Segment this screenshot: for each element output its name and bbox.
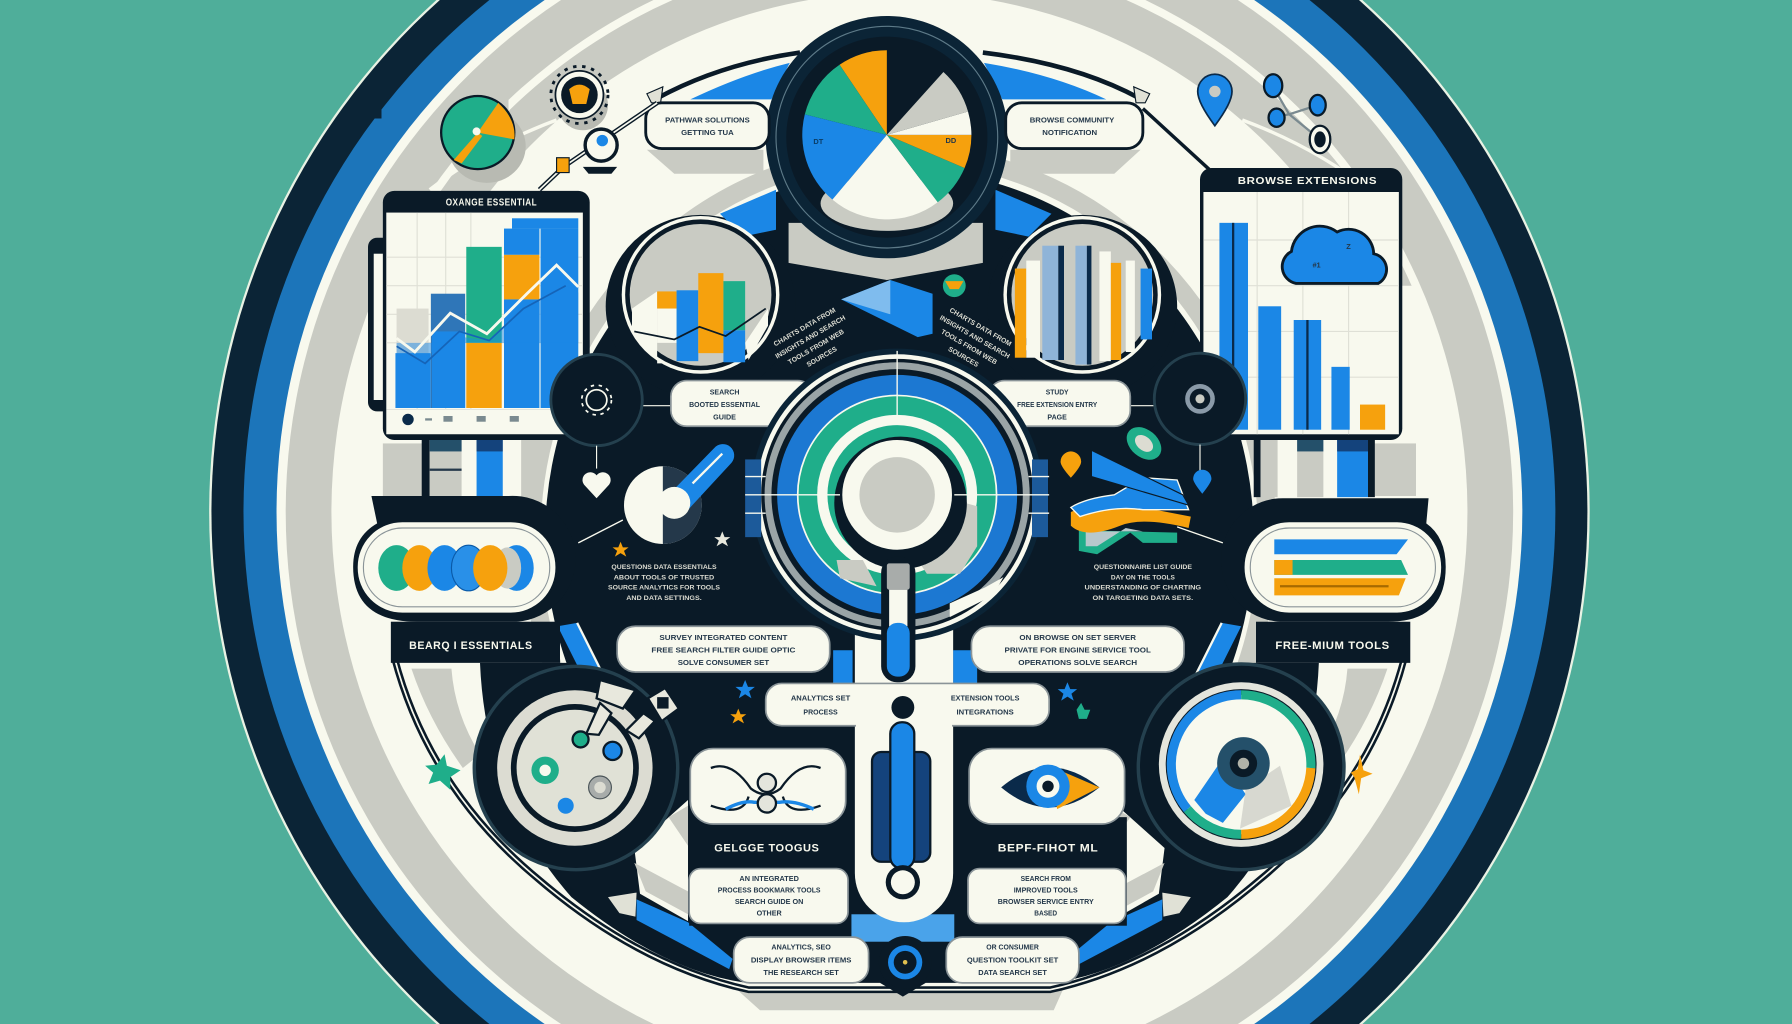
white star <box>714 531 730 546</box>
pie labels: DT <box>813 137 824 146</box>
right description text: QUESTIONNAIRE LIST GUIDE <box>1094 564 1192 571</box>
top right pill: BROWSE COMMUNITY <box>1030 115 1114 124</box>
right small card: BASED <box>1034 908 1058 917</box>
small text diagonal right: SOURCES <box>947 346 980 369</box>
bottom right pill <box>946 937 1079 983</box>
orange pin <box>1061 451 1081 478</box>
right description text <box>1085 564 1201 602</box>
left magnified bars circle <box>622 216 779 374</box>
center left pill <box>671 381 814 426</box>
left small card: AN INTEGRATED <box>739 874 799 883</box>
small text diagonal right: INSIGHTS AND SEARCH <box>938 315 1011 361</box>
dark central body <box>480 169 1319 997</box>
center rod <box>872 696 930 899</box>
probes <box>573 680 679 760</box>
lower left pill: FREE SEARCH FILTER GUIDE OPTIC <box>651 646 796 655</box>
left tool illustration <box>624 444 734 544</box>
left description text: ABOUT TOOLS OF TRUSTED <box>614 574 714 581</box>
center right pill <box>989 381 1130 426</box>
top pie chart <box>766 16 1008 258</box>
card label: BEPF-FIHOT ML <box>998 842 1098 854</box>
right small orange star <box>1351 754 1373 794</box>
left description text: SOURCE ANALYTICS FOR TOOLS <box>608 585 720 592</box>
bottom left pill: ANALYTICS, SEO <box>771 943 831 952</box>
blue bottom bands <box>608 893 1191 969</box>
top right pill: NOTIFICATION <box>1042 128 1097 137</box>
blue pin <box>1193 470 1211 494</box>
gray wedges beside gauges <box>411 669 1387 1010</box>
right magnified bars circle <box>1003 216 1161 374</box>
center left pill: SEARCH <box>710 387 739 396</box>
top left pill: PATHWAR SOLUTIONS <box>665 115 750 124</box>
left small card: PROCESS BOOKMARK TOOLS <box>718 886 821 895</box>
blue and navy stars <box>735 680 755 698</box>
lower ring line <box>394 657 1405 990</box>
horizontal cross pill: INTEGRATIONS <box>957 707 1014 716</box>
bottom center target <box>879 936 931 989</box>
small text diagonal left <box>769 305 858 380</box>
top left pill: GETTING TUA <box>681 128 734 137</box>
concentric outer rings <box>209 0 1590 1024</box>
eye icon <box>1001 765 1099 809</box>
bottom right pill: QUESTION TOOLKIT SET <box>967 955 1059 964</box>
left gear node <box>551 354 686 469</box>
small text diagonal left: INSIGHTS AND SEARCH <box>774 315 847 361</box>
bottom left pill <box>734 937 869 983</box>
right stacked tool illustration <box>1071 420 1191 554</box>
cloud icon <box>1282 226 1387 283</box>
lower left pill <box>617 626 830 672</box>
left small card: OTHER <box>757 908 782 917</box>
map pin top right <box>1198 74 1232 126</box>
gear icon <box>551 66 608 130</box>
left capsule panel <box>353 496 576 663</box>
right small card: IMPROVED TOOLS <box>1014 886 1078 895</box>
top left pill <box>646 103 769 149</box>
right description text: DAY ON THE TOOLS <box>1111 574 1175 581</box>
shadows under top pills <box>647 150 1141 174</box>
orange small star <box>730 709 746 723</box>
small top left pie icon <box>440 95 526 183</box>
right description text: ON TARGETING DATA SETS. <box>1093 595 1193 602</box>
center right pill: STUDY <box>1046 387 1069 396</box>
left small card <box>689 749 848 926</box>
top blue arch <box>647 53 1211 171</box>
green mark <box>1077 703 1090 719</box>
pie labels <box>813 136 957 146</box>
bottom right pill: OR CONSUMER <box>986 943 1039 952</box>
panel label <box>1256 622 1410 663</box>
left description text: QUESTIONS DATA ESSENTIALS <box>611 564 717 571</box>
lower right pill: ON BROWSE ON SET SERVER <box>1019 633 1137 642</box>
small text diagonal left: TOOLS FROM WEB <box>787 329 846 366</box>
small text diagonal right <box>927 305 1016 380</box>
cloud icon: #1 <box>1312 260 1321 269</box>
lower right pill: OPERATIONS SOLVE SEARCH <box>1018 658 1137 667</box>
panel label <box>391 622 560 663</box>
center left pill: BOOTED ESSENTIAL <box>689 400 760 409</box>
connector node <box>539 103 657 190</box>
lower left pill: SOLVE CONSUMER SET <box>678 658 770 667</box>
left small star <box>425 754 461 790</box>
network nodes <box>1264 74 1330 153</box>
small text diagonal right: CHARTS DATA FROM <box>948 307 1013 348</box>
center left pill: GUIDE <box>713 412 736 421</box>
right target node <box>1126 353 1246 471</box>
tiny badge <box>943 274 966 297</box>
side tabs <box>745 459 1048 537</box>
top right pill <box>1006 103 1143 149</box>
center right pill: PAGE <box>1047 412 1067 421</box>
lens shadow <box>837 501 1003 617</box>
gray hexagon with blue shard <box>789 223 983 337</box>
small text diagonal left: SOURCES <box>806 346 839 369</box>
chart heading: OXANGE ESSENTIAL <box>446 198 537 209</box>
pie labels: DD <box>946 136 957 145</box>
small text diagonal right: TOOLS FROM WEB <box>940 329 998 366</box>
fan strips below gauges <box>634 800 1165 921</box>
vertical ivory stem <box>855 571 953 922</box>
right small card <box>968 749 1127 926</box>
lower right pill: PRIVATE FOR ENGINE SERVICE TOOL <box>1005 646 1151 655</box>
magnifier handle <box>881 557 915 682</box>
left description text <box>608 564 720 602</box>
horizontal cross pill <box>766 683 1049 731</box>
center right pill: FREE EXTENSION ENTRY <box>1017 400 1097 409</box>
heart icon <box>583 472 611 498</box>
right description text: UNDERSTANDING OF CHARTING <box>1085 585 1201 592</box>
right small card: SEARCH FROM <box>1021 874 1071 883</box>
small text diagonal left: CHARTS DATA FROM <box>773 307 837 348</box>
pill connector lines <box>578 520 1223 543</box>
column stripes under charts <box>383 440 1416 497</box>
right bar chart panel <box>1200 168 1402 440</box>
horizontal cross pill: PROCESS <box>803 707 838 716</box>
card label: GELGGE TOOGUS <box>714 842 819 854</box>
panel label: FREE-MIUM TOOLS <box>1275 640 1390 652</box>
right gauge ring <box>1138 664 1344 870</box>
right blue star <box>1058 682 1077 701</box>
horizontal cross pill: EXTENSION TOOLS <box>951 694 1019 703</box>
lower left pill: SURVEY INTEGRATED CONTENT <box>659 633 788 642</box>
cloud icon: Z <box>1346 242 1351 251</box>
right bars capsule panel <box>1221 498 1446 663</box>
left gauge dial <box>474 666 679 870</box>
bottom left pill: DISPLAY BROWSER ITEMS <box>751 955 851 964</box>
panel label: BEARQ I ESSENTIALS <box>409 640 533 652</box>
left small card: SEARCH GUIDE ON <box>735 897 803 906</box>
center magnifier <box>745 349 1049 682</box>
wave icon <box>711 766 821 813</box>
chart heading: BROWSE EXTENSIONS <box>1238 176 1377 187</box>
inner gray ring around body <box>531 153 1267 921</box>
right small card: BROWSER SERVICE ENTRY <box>998 897 1094 906</box>
left description text: AND DATA SETTINGS. <box>626 595 702 602</box>
lower right pill <box>971 626 1184 672</box>
left bar chart panel <box>368 191 590 440</box>
orange star <box>613 542 629 557</box>
bottom left pill: THE RESEARCH SET <box>763 968 839 977</box>
horizontal cross pill: ANALYTICS SET <box>791 694 851 703</box>
bottom right pill: DATA SEARCH SET <box>978 968 1047 977</box>
